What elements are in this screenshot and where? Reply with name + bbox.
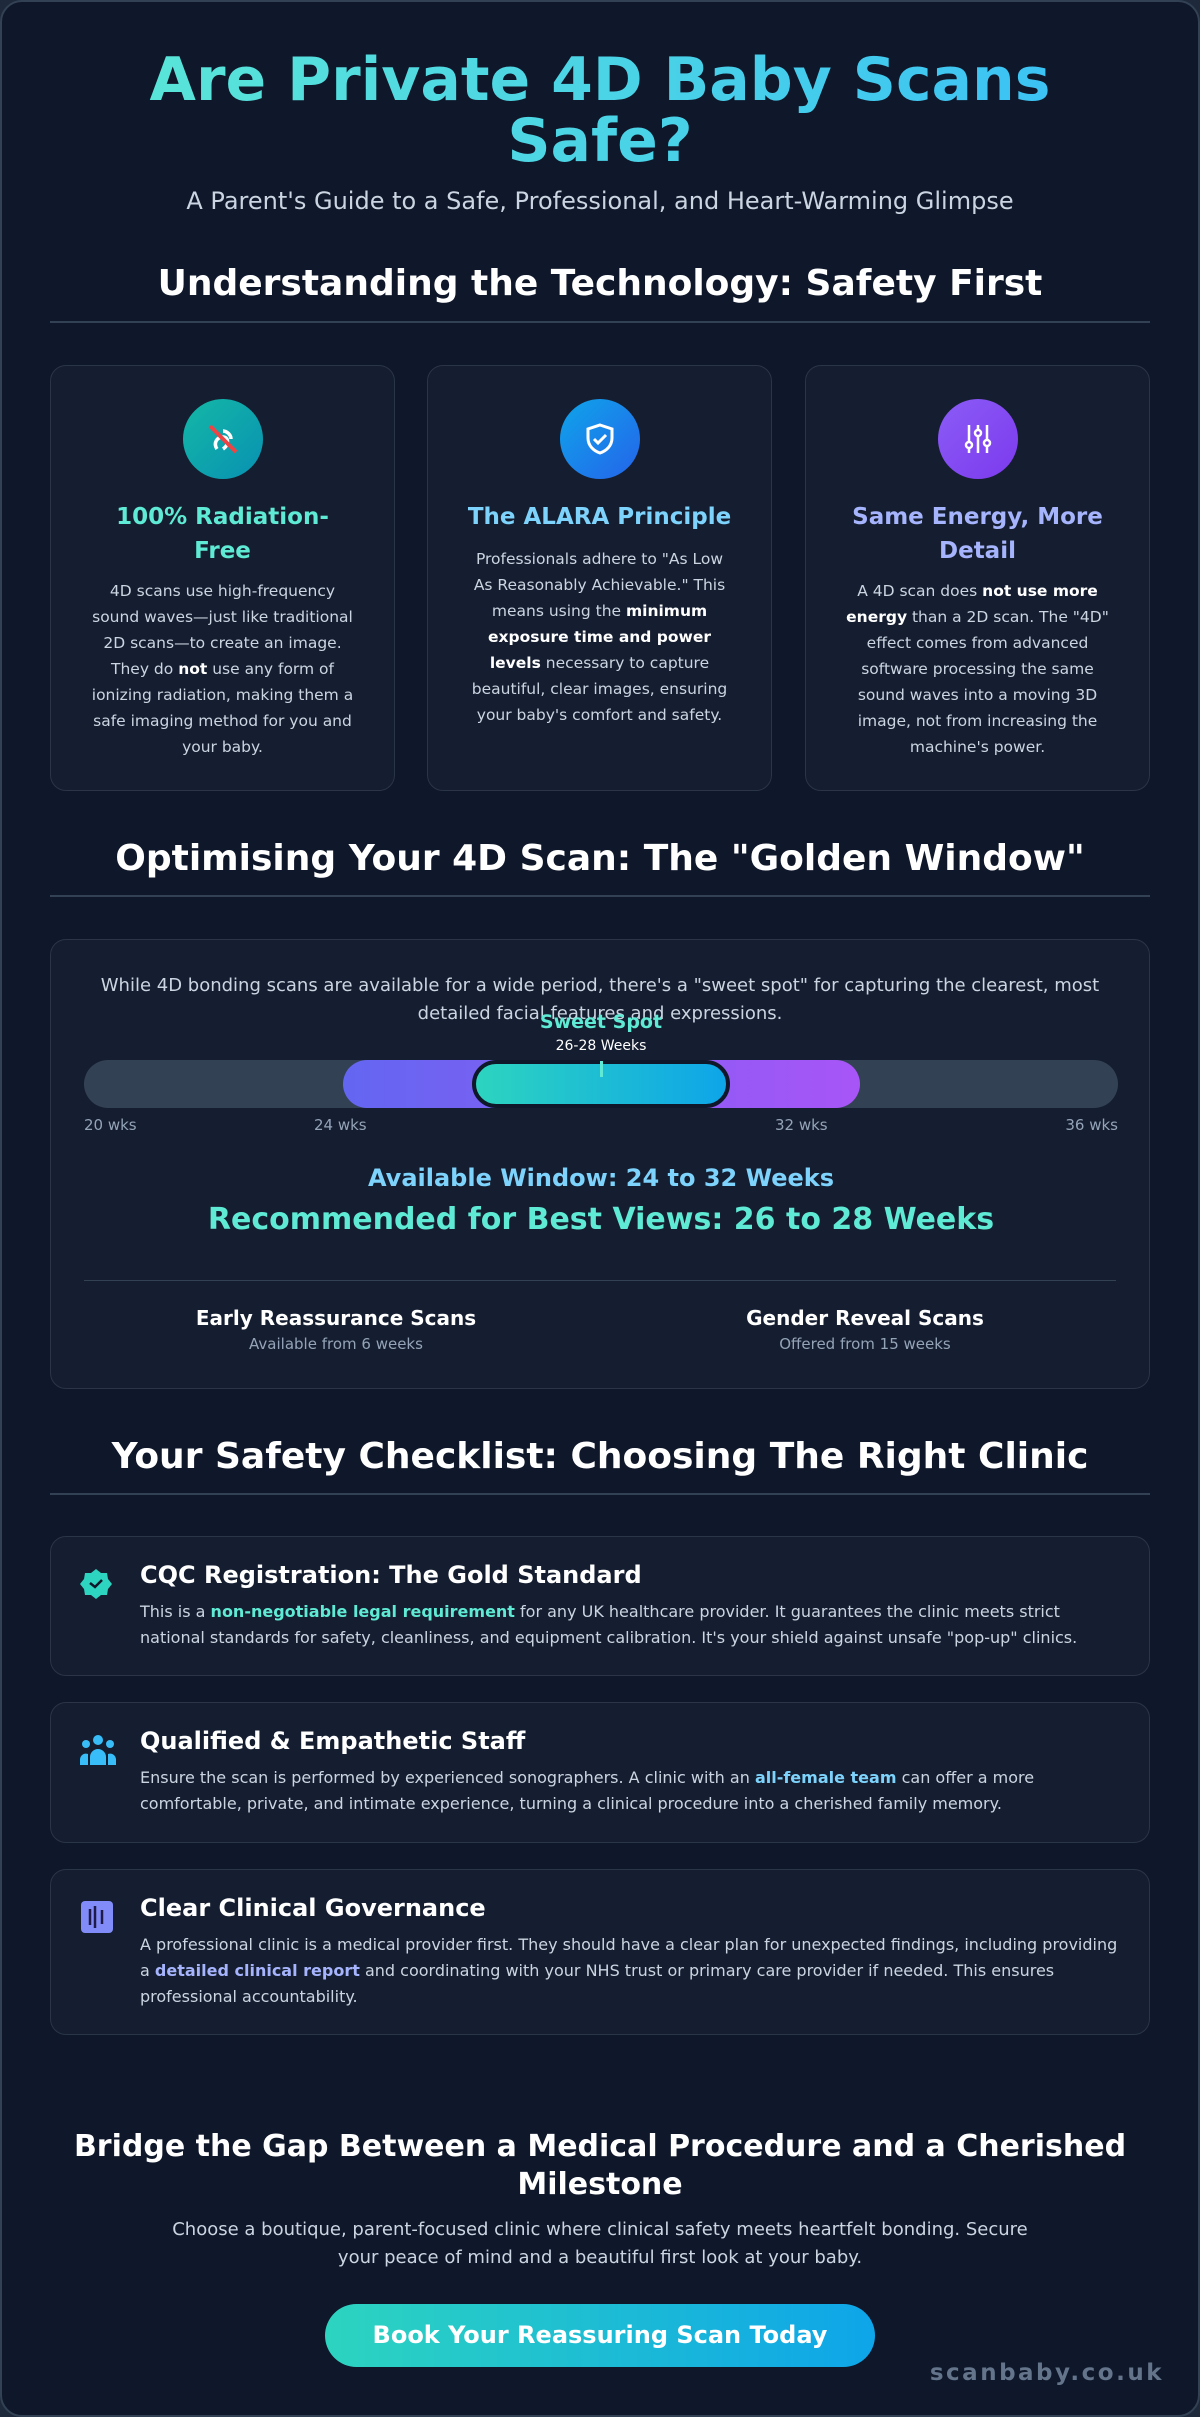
card text: A 4D scan does not use more energy than a 2D scan. The "4D" effect comes from advanced software processing the same sound waves into a moving 3D image, not from increasing the machine's power.	[846, 582, 1109, 756]
checklist: governance: A professional clinic is a medical provider first. They should have a clear plan for unexpected findings, including providing a detailed clinical report and coordinating with your NHS trust or primary care provider if needed. This ensures professional accountability.	[140, 1935, 1117, 2006]
heading: checklist: Your Safety Checklist: Choosing The Right Clinic	[112, 1436, 1088, 1477]
icon: people	[80, 1735, 116, 1765]
available window: Available Window: 24 to 32 Weeks	[368, 1164, 834, 1192]
card title	[116, 504, 329, 564]
checklist: governance: Clear Clinical Governance	[140, 1894, 486, 1922]
card text: Professionals adhere to "As Low	[476, 550, 723, 568]
early scans	[196, 1306, 476, 1353]
card text: your baby's comfort and safety.	[477, 706, 722, 724]
gender scans	[746, 1306, 984, 1353]
panel: same energy	[805, 365, 1150, 791]
early scans: Available from 6 weeks	[249, 1335, 423, 1353]
timeline chart: 26-28 Weeks	[556, 1038, 646, 1054]
icon: report	[81, 1901, 113, 1933]
card title: Detail	[939, 538, 1016, 564]
CTA heading: Milestone	[517, 2167, 683, 2202]
heading: golden window: Optimising Your 4D Scan: The "Golden Window"	[115, 838, 1085, 879]
heading: technology: Understanding the Technology: Safety First	[158, 263, 1042, 304]
gender scans: Gender Reveal Scans	[746, 1306, 984, 1330]
card text: exposure time and power	[488, 628, 711, 646]
icon: badge	[80, 1569, 112, 1599]
card title	[852, 504, 1103, 564]
card title: Same Energy, More	[852, 504, 1103, 530]
timeline chart: 24 wks	[314, 1116, 367, 1134]
checklist: CQC: CQC Registration: The Gold Standard	[140, 1561, 642, 1589]
card text: means using the minimum	[492, 602, 707, 620]
icon: shield	[560, 399, 640, 479]
checklist: staff: Ensure the scan is performed by experienced sonographers. A clinic with an all-female team can offer a more comfortable, private, and intimate experience, turning a clinical procedure into a cherished family memory.	[140, 1768, 1034, 1813]
CTA button: Book Your Reassuring Scan Today	[373, 2321, 827, 2349]
card text: 4D scans use high-frequency sound waves—just like traditional 2D scans—to create an image. They do not use any form of ionizing radiation, making them a safe imaging method for you and your baby.	[92, 582, 353, 756]
panel: ALARA	[427, 365, 772, 791]
CTA heading	[74, 2129, 1126, 2202]
title: Are Private 4D Baby Scans	[150, 45, 1050, 115]
timeline chart	[84, 1011, 1118, 1134]
checklist: CQC: This is a non-negotiable legal requirement for any UK healthcare provider. It guarantees the clinic meets strict national standards for safety, cleanliness, and equipment calibration. It's your shield against unsafe "pop-up" clinics.	[140, 1602, 1077, 1647]
checklist: staff	[50, 1702, 1150, 1843]
card title: Free	[194, 538, 251, 564]
watermark: scanbaby.co.uk	[930, 2360, 1164, 2386]
checklist: staff: Qualified & Empathetic Staff	[140, 1727, 525, 1755]
gender scans: Offered from 15 weeks	[779, 1335, 951, 1353]
card text: levels necessary to capture	[490, 654, 709, 672]
intro text: While 4D bonding scans are available for a wide period, there's a "sweet spot" for capturing the clearest, most detailed facial features and expressions.	[101, 975, 1099, 1024]
tick labels: 20 wks	[84, 1116, 137, 1134]
card text	[472, 550, 727, 724]
icon: sliders	[938, 399, 1018, 479]
card text: beautiful, clear images, ensuring	[472, 680, 727, 698]
timeline chart: 32 wks	[775, 1116, 828, 1134]
CTA text: Choose a boutique, parent-focused clinic where clinical safety meets heartfelt bonding. Secure your peace of mind and a beautiful first look at your baby.	[172, 2219, 1028, 2268]
card title: The ALARA Principle	[468, 504, 731, 530]
CTA button	[325, 2304, 875, 2367]
timeline chart: 36 wks	[1065, 1116, 1118, 1134]
title: Safe?	[507, 106, 693, 176]
subtitle: A Parent's Guide to a Safe, Professional, and Heart-Warming Glimpse	[186, 187, 1014, 215]
card title: 100% Radiation-	[116, 504, 329, 530]
card text: As Reasonably Achievable." This	[474, 576, 725, 594]
icon: no radiation	[182, 399, 262, 479]
CTA heading: Bridge the Gap Between a Medical Procedure and a Cherished	[74, 2129, 1126, 2164]
recommended: Recommended for Best Views: 26 to 28 Weeks	[208, 1202, 994, 1237]
title	[0, 50, 1200, 172]
panel: radiation-free	[50, 365, 395, 791]
sweet spot label: Sweet Spot	[540, 1011, 662, 1033]
panel: golden window	[50, 939, 1150, 1389]
checklist: governance	[50, 1869, 1150, 2035]
early scans: Early Reassurance Scans	[196, 1306, 476, 1330]
checklist: CQC	[50, 1536, 1150, 1676]
